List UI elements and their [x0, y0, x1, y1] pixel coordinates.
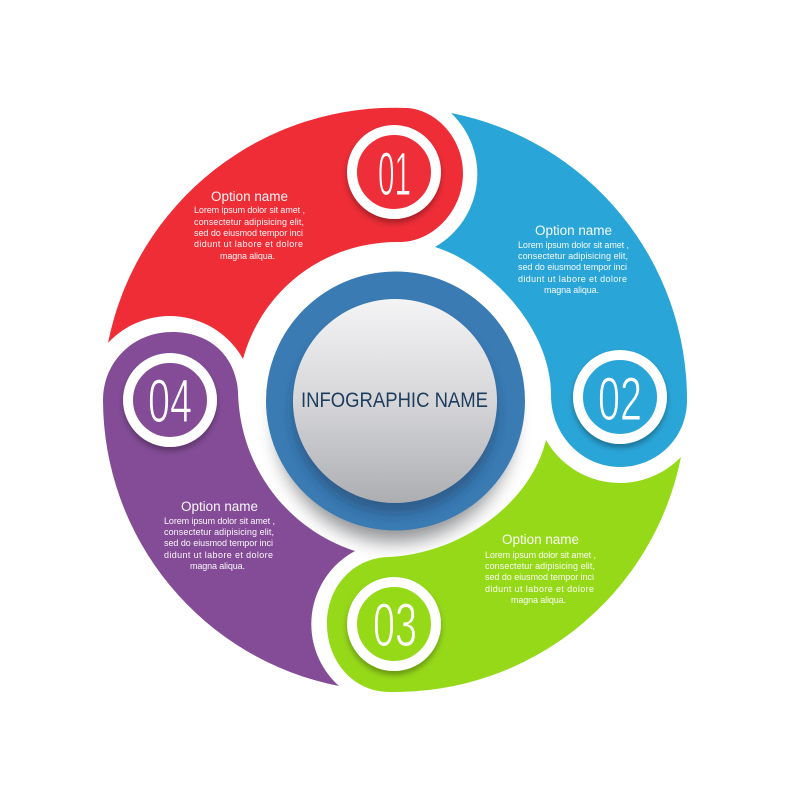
- badge 01: 01: [378, 140, 411, 208]
- text block 01: sed do eiusmod tempor inci: [194, 228, 303, 238]
- badge 04: 04: [148, 367, 192, 435]
- blue ring: [266, 272, 525, 530]
- text block 04: Lorem ipsum dolor sit amet ,: [164, 516, 275, 526]
- badge 01: [352, 130, 436, 214]
- central ring shadow: [277, 306, 513, 542]
- badge 03: 03: [373, 591, 417, 659]
- center hub: [266, 272, 525, 530]
- blue segment shape: [435, 113, 687, 467]
- green segment shape: [327, 440, 681, 692]
- text block 01: magna aliqua.: [220, 251, 275, 261]
- text block 02: didunt ut labore et dolore: [518, 274, 627, 284]
- text block 01: didunt ut labore et dolore: [194, 239, 303, 249]
- text block 04: didunt ut labore et dolore: [164, 550, 273, 560]
- text block 01: Lorem ipsum dolor sit amet ,: [194, 205, 305, 215]
- text block 03: consectetur adipisicing elit,: [485, 561, 595, 571]
- text block 04: consectetur adipisicing elit,: [164, 527, 274, 537]
- panel: option 04 (purple): [103, 332, 355, 686]
- red segment shape: [108, 108, 463, 359]
- title: INFOGRAPHIC NAME: [301, 389, 488, 412]
- text block 02: magna aliqua.: [544, 285, 599, 295]
- text block 02: Lorem ipsum dolor sit amet ,: [518, 240, 629, 250]
- text block 01: consectetur adipisicing elit,: [194, 217, 304, 227]
- text block 03: didunt ut labore et dolore: [485, 584, 594, 594]
- panel: option 01 (red): [108, 108, 463, 359]
- text block 03: sed do eiusmod tempor inci: [485, 572, 594, 582]
- text block 01: Option name: [211, 189, 288, 204]
- text block 03: Lorem ipsum dolor sit amet ,: [485, 550, 596, 560]
- text block 04: magna aliqua.: [190, 561, 245, 571]
- grey disc: [293, 299, 497, 503]
- text block 02: sed do eiusmod tempor inci: [518, 262, 627, 272]
- text block 02: consectetur adipisicing elit,: [518, 251, 628, 261]
- badge 04: [128, 358, 212, 442]
- text block 01: [194, 189, 305, 261]
- purple segment shape: [103, 332, 355, 686]
- text block 04: sed do eiusmod tempor inci: [164, 538, 273, 548]
- badge 02: 02: [598, 365, 642, 433]
- text block 04: [164, 499, 275, 571]
- text block 03: [485, 532, 596, 605]
- badge 02: [578, 355, 662, 439]
- badge 03: [352, 582, 436, 666]
- panel: option 03 (green): [327, 440, 681, 692]
- text block 02: Option name: [535, 223, 612, 238]
- text block 03: magna aliqua.: [511, 595, 566, 605]
- text block 04: Option name: [181, 499, 258, 514]
- text block 02: [518, 223, 629, 295]
- text block 03: Option name: [502, 532, 579, 547]
- panel: option 02 (blue): [435, 113, 687, 467]
